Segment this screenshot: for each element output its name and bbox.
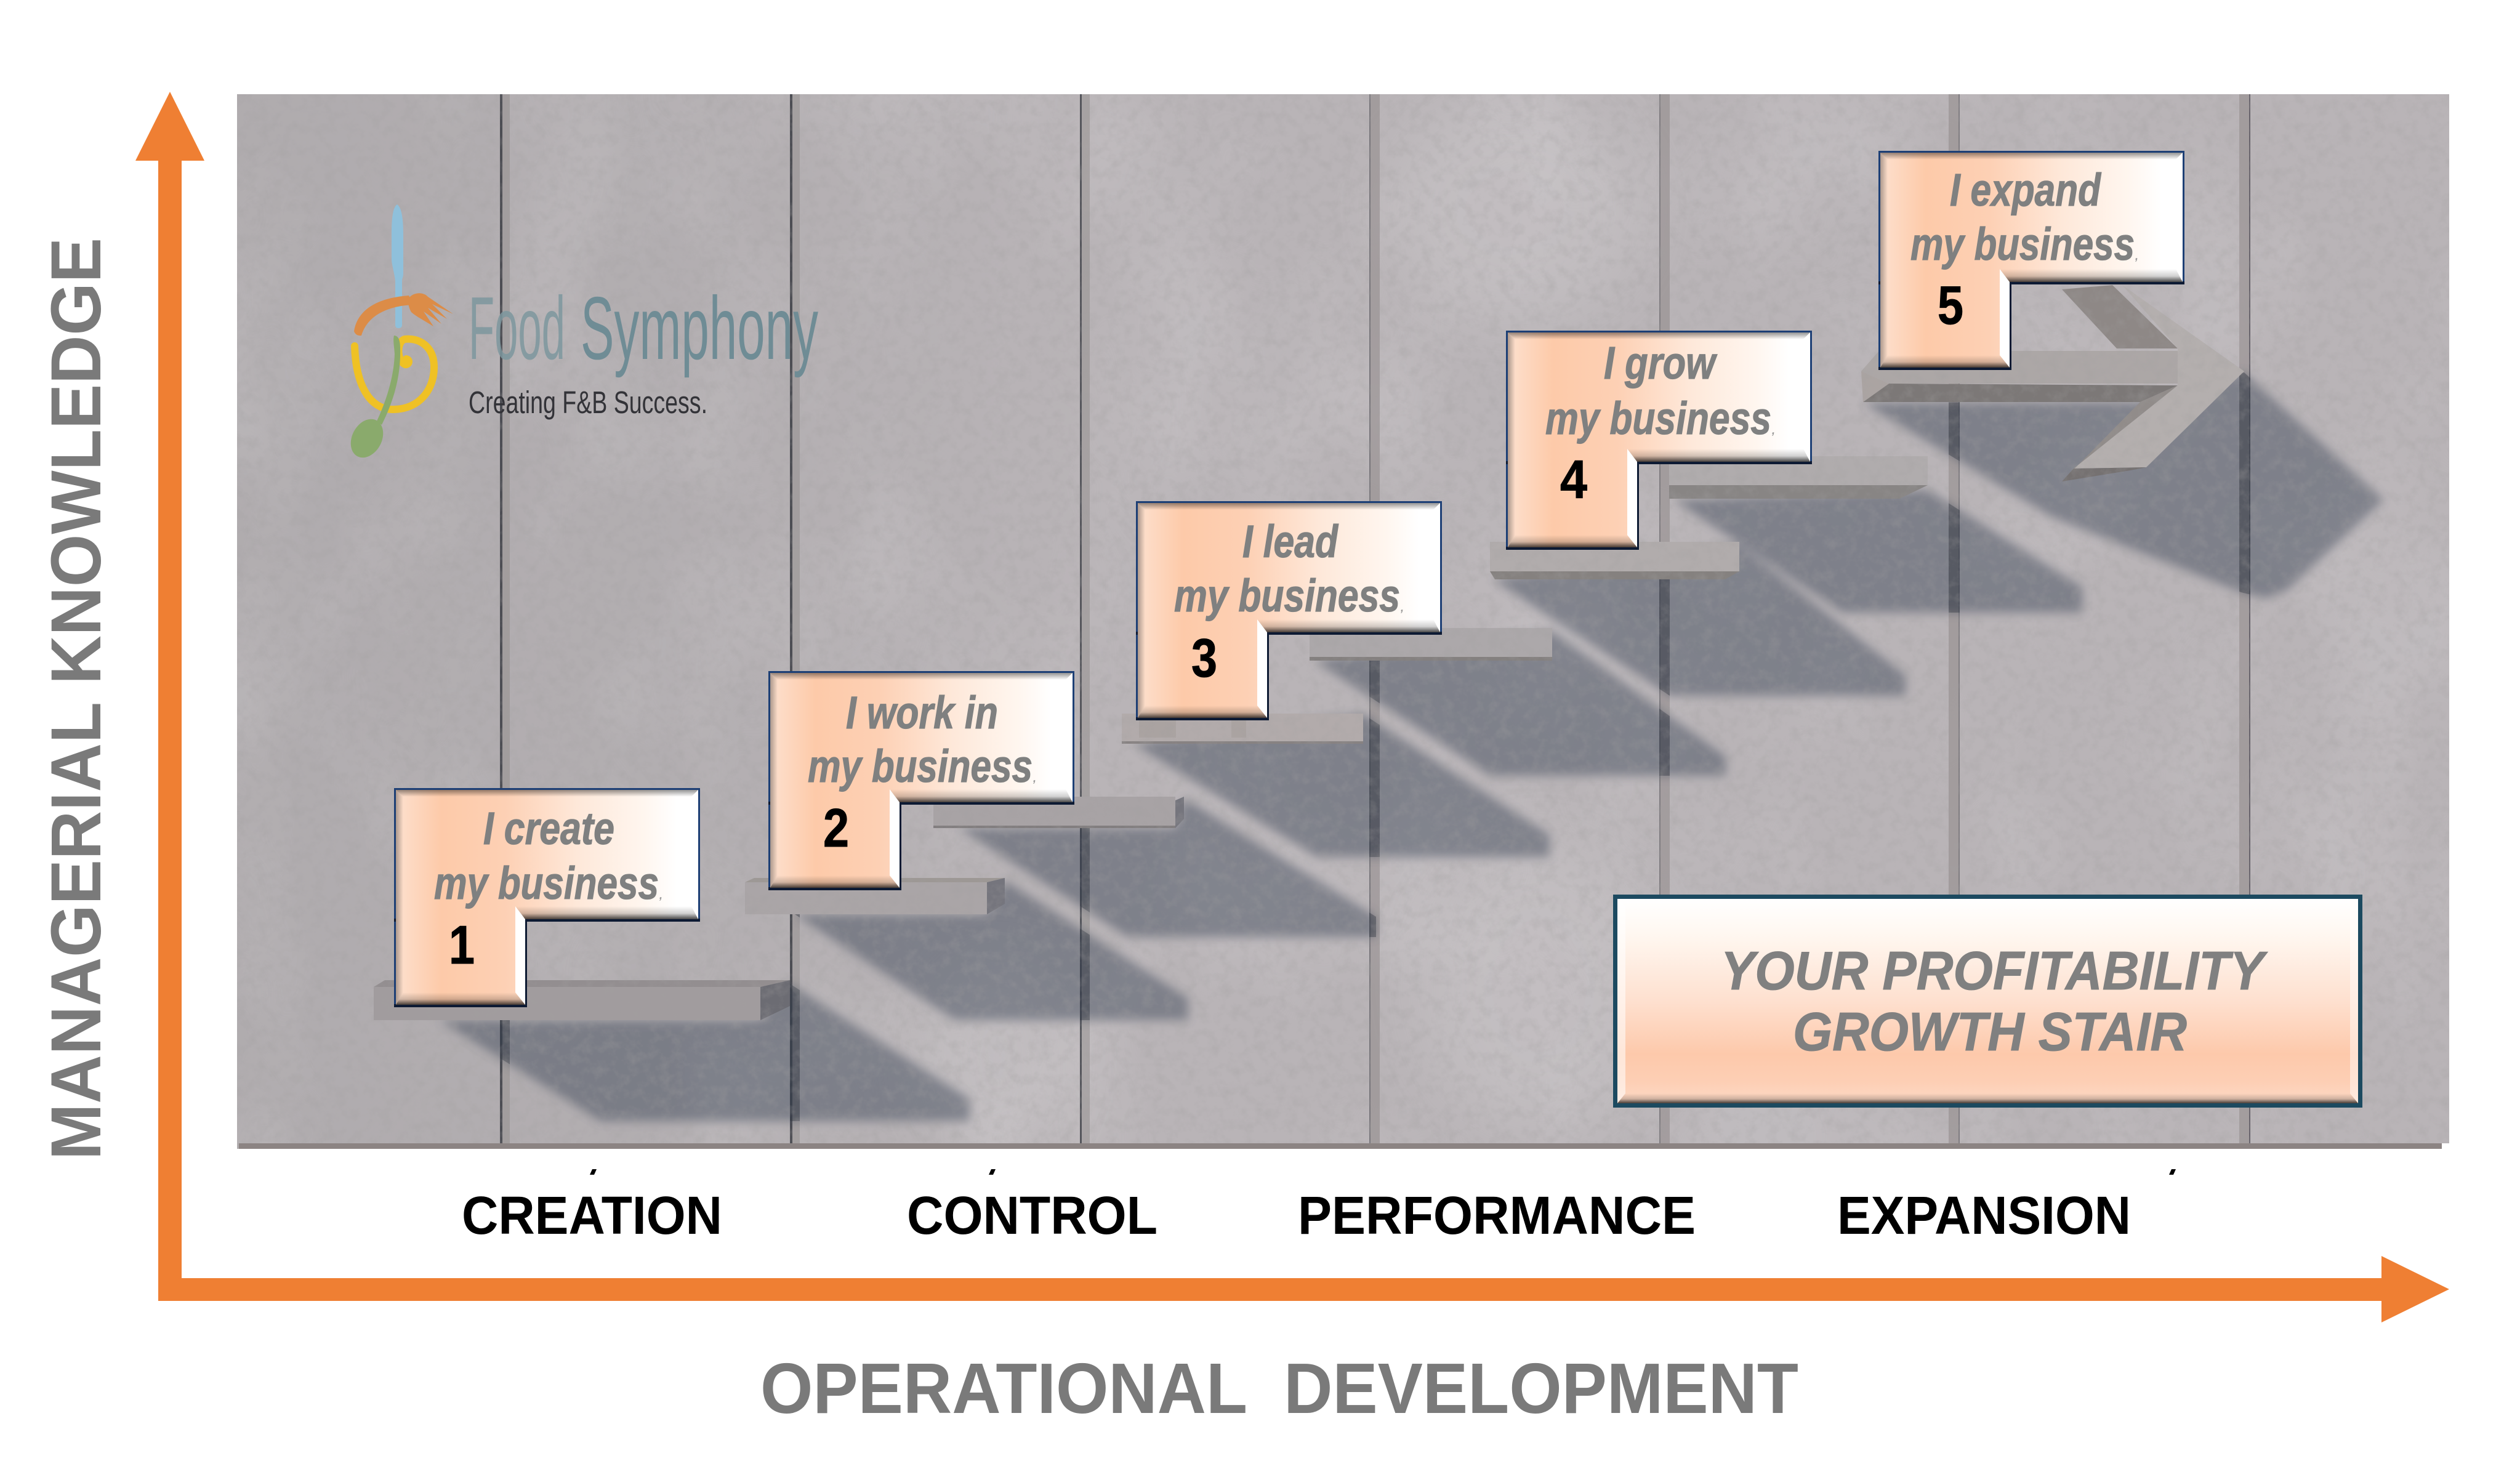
box 5: I expand my business: my business xyxy=(1910,219,2135,270)
box 1: I create my business xyxy=(394,788,700,1007)
step 8 with arrow head xyxy=(1861,285,2244,481)
logo: Food Symphony xyxy=(344,204,818,463)
box 2: I work in my business: I work in xyxy=(846,687,998,738)
stair shadows xyxy=(440,372,2383,1121)
icon: knife xyxy=(392,204,403,328)
box 4: I grow my business: 4 xyxy=(1560,449,1587,510)
box 3: I lead my business: I lead xyxy=(1242,516,1338,567)
box 5: I expand my business xyxy=(1878,151,2184,370)
box 4: I grow my business: I grow xyxy=(1604,337,1718,388)
step 7 xyxy=(1669,456,1928,499)
box 1: I create my business: 1 xyxy=(449,914,475,975)
icon: fork xyxy=(354,293,453,336)
step 2 xyxy=(745,878,1005,914)
box 2: I work in my business: 2 xyxy=(823,797,849,858)
box 1: I create my business: my business xyxy=(434,858,659,909)
brand name: Symphony xyxy=(581,278,818,378)
brand name xyxy=(469,278,818,378)
stage labels xyxy=(462,1169,2176,1246)
title box: YOUR PROFITABILITY xyxy=(1721,940,2268,1001)
horizontal axis arrow xyxy=(158,1256,2449,1322)
box 3: I lead my business xyxy=(1136,501,1442,720)
brand name: Food xyxy=(469,278,565,378)
box 3: I lead my business: my business xyxy=(1174,570,1400,621)
box 4: I grow my business xyxy=(1506,331,1812,550)
title box xyxy=(1613,895,2362,1108)
icon: spoon xyxy=(344,336,400,463)
step 6 xyxy=(1490,542,1739,579)
box 2: I work in my business: my business xyxy=(808,741,1033,792)
box 5: I expand my business: I expand xyxy=(1950,164,2101,215)
tagline: Creating F&B Success. xyxy=(469,385,707,420)
stage labels: CONTROL xyxy=(907,1186,1157,1246)
box 5: I expand my business: , xyxy=(2135,250,2138,262)
step 3 xyxy=(933,797,1184,828)
step 1 xyxy=(374,980,790,1020)
stage labels: CREATION xyxy=(462,1186,722,1246)
floating concrete steps xyxy=(374,285,2244,1020)
y axis title: MANAGERIAL KNOWLEDGE xyxy=(37,238,116,1160)
title box: GROWTH STAIR xyxy=(1793,1001,2187,1062)
box 5: I expand my business: 5 xyxy=(1938,275,1963,336)
box 1: I create my business: I create xyxy=(483,803,614,854)
box 3: I lead my business: 3 xyxy=(1191,627,1217,688)
stage labels: PERFORMANCE xyxy=(1298,1186,1696,1246)
box 4: I grow my business: my business xyxy=(1545,393,1771,444)
box 2: I work in my business: , xyxy=(1033,772,1036,784)
box 1: I create my business: , xyxy=(659,889,662,901)
stage labels: EXPANSION xyxy=(1837,1186,2131,1246)
vertical axis arrow xyxy=(135,92,204,1301)
box 4: I grow my business: , xyxy=(1771,424,1775,437)
step 5 xyxy=(1310,628,1552,661)
box 2: I work in my business xyxy=(768,671,1074,890)
chart background: concrete wall xyxy=(237,92,2449,1164)
icon: yellow swirl xyxy=(355,339,434,409)
box 3: I lead my business: , xyxy=(1400,602,1404,614)
step 4 xyxy=(1122,714,1363,744)
wall texture xyxy=(237,94,2449,1143)
x axis title: OPERATIONAL DEVELOPMENT xyxy=(760,1348,1798,1428)
